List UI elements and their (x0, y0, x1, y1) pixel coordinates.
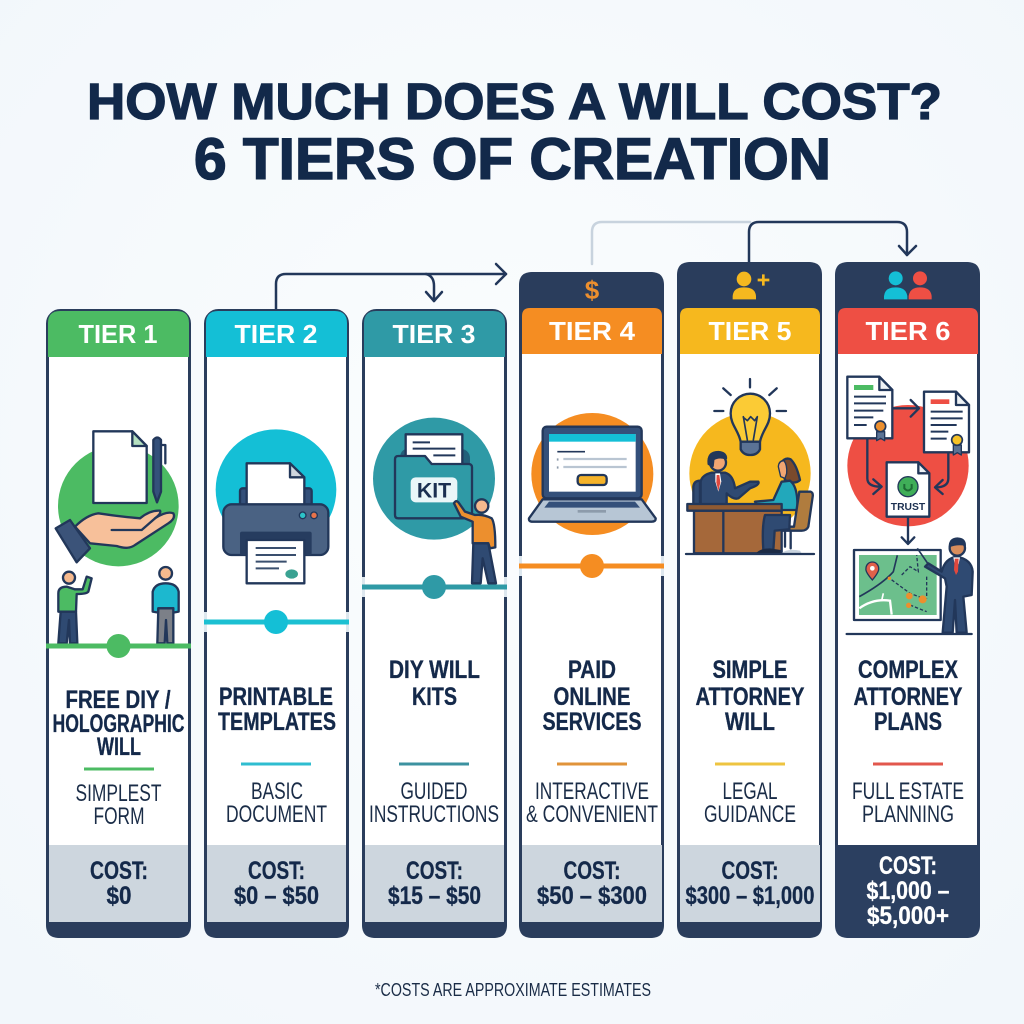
icon: attorney consultation with lightbulb (686, 379, 814, 554)
tier 4 name: PAID (568, 656, 616, 684)
tier 2 cost: COST: (248, 857, 305, 885)
tier 4 name: ONLINE (554, 683, 630, 711)
tier 1 name: FREE DIY / (66, 686, 171, 714)
tier 1 name: HOLOGRAPHIC (52, 710, 184, 738)
tier 3 name (389, 656, 480, 711)
tier 1 description (76, 780, 162, 830)
tier 6 cost: $5,000+ (867, 902, 949, 930)
tier 4 cost (519, 845, 664, 938)
panel: tier 2 (204, 310, 349, 938)
tier 1 cost: COST: (90, 857, 148, 885)
tier 6 header (838, 308, 978, 354)
tier 2 cost (204, 845, 349, 938)
tier 5 header (680, 308, 820, 354)
tier 1 header: TIER 1 (78, 319, 158, 349)
tier 2 cost: $0 – $50 (234, 882, 319, 910)
tier 2 name: TEMPLATES (218, 708, 336, 736)
tier 2 header: TIER 2 (234, 319, 318, 349)
tier 1 cost (46, 845, 191, 938)
tier 2 description: DOCUMENT (226, 801, 327, 828)
title: 6 TIERS OF CREATION (194, 127, 831, 192)
tier 4 cost: COST: (564, 857, 620, 885)
panel: tier 5 (677, 262, 822, 938)
tier 4 header: TIER 4 (549, 316, 636, 346)
tier 3 name: DIY WILL (389, 656, 480, 684)
tier 1 description: FORM (94, 803, 144, 830)
tier 5 description: GUIDANCE (704, 801, 796, 828)
tier 1 cost: $0 (106, 882, 132, 910)
tier 6 header: TIER 6 (866, 316, 950, 346)
tier 3 name: KITS (412, 683, 457, 711)
icon: will kit folder with person: KIT (417, 478, 451, 502)
tier 2 name: PRINTABLE (219, 683, 333, 711)
panel: tier 6 (835, 262, 980, 938)
tier 1 timeline marker (46, 634, 191, 658)
tier 5 description: LEGAL (722, 778, 778, 805)
icon: will kit folder with person (373, 418, 496, 583)
tier 3 cost: $15 – $50 (388, 882, 481, 910)
tier 5 description (704, 778, 796, 828)
tier 6 description: PLANNING (862, 801, 954, 828)
tier 6 name: ATTORNEY (854, 683, 963, 711)
tier 4 name (542, 656, 642, 736)
tier 6 name (854, 656, 963, 736)
tier 1 name: WILL (97, 733, 141, 761)
title (87, 73, 942, 192)
tier 5 name: SIMPLE (712, 656, 788, 684)
icon: person with plus (733, 272, 769, 299)
tier 5 name (696, 656, 805, 736)
tier 6 name: PLANS (874, 708, 942, 736)
tier 5 cost: COST: (722, 857, 778, 885)
arrow: tier 2 connector to tier 3 and tier 4 (276, 264, 506, 309)
tier 3 description: INSTRUCTIONS (369, 801, 499, 828)
tier 3 header (364, 311, 505, 357)
tier 3 description (369, 778, 499, 828)
tier 6 description (852, 778, 964, 828)
icon: laptop (529, 413, 656, 535)
tier 2 description: BASIC (251, 778, 303, 805)
tier 6 cost: $1,000 – (866, 877, 950, 905)
tier 3 header: TIER 3 (392, 319, 476, 349)
panel: tier 1 (46, 310, 191, 938)
icon: hand holding document and pen with two people (56, 431, 179, 643)
tier 5 name: ATTORNEY (696, 683, 805, 711)
tier 1 name (52, 686, 184, 761)
tier 4 cost: $50 – $300 (537, 882, 647, 910)
tier 2 name (218, 683, 336, 736)
icon: estate plan documents, trust and map: TRUST (891, 502, 926, 513)
title: HOW MUCH DOES A WILL COST? (87, 73, 942, 130)
icon: two people (884, 271, 932, 299)
tier 5 name: WILL (725, 708, 775, 736)
tier 5 cost: $300 – $1,000 (686, 882, 814, 910)
tier 2 timeline marker (204, 610, 349, 634)
tier 4 description (526, 778, 658, 828)
tier 6 cost (835, 845, 980, 938)
tier 4 header (522, 308, 662, 354)
tier 3 cost: COST: (406, 857, 463, 885)
tier 4 description: INTERACTIVE (535, 778, 649, 805)
tier 1 description: SIMPLEST (76, 780, 162, 807)
panel: tier 3 (362, 310, 507, 938)
icon: printer (216, 429, 336, 583)
icon: estate plan documents, trust and map (847, 377, 973, 634)
tier 6 description: FULL ESTATE (852, 778, 964, 805)
tier 5 cost (677, 845, 822, 938)
icon: dollar sign: $ (585, 275, 600, 305)
tier 1 header (48, 311, 189, 357)
tier 6 cost: COST: (879, 852, 937, 880)
tier 5 header: TIER 5 (708, 316, 792, 346)
footnote: *COSTS ARE APPROXIMATE ESTIMATES (375, 980, 651, 1000)
tier 2 description (226, 778, 327, 828)
tier 3 description: GUIDED (400, 778, 468, 805)
tier 4 name: SERVICES (542, 708, 642, 736)
tier 4 timeline marker (519, 554, 664, 578)
tier 6 name: COMPLEX (858, 656, 958, 684)
arrow: light connector from tier 4 (592, 222, 750, 264)
arrow: tier 5 connector to tier 6 (749, 222, 916, 262)
tier 3 cost (362, 845, 507, 938)
panel: tier 4 (519, 272, 664, 938)
tier 4 description: & CONVENIENT (526, 801, 658, 828)
tier 3 timeline marker (362, 575, 507, 599)
tier 2 header (206, 311, 347, 357)
